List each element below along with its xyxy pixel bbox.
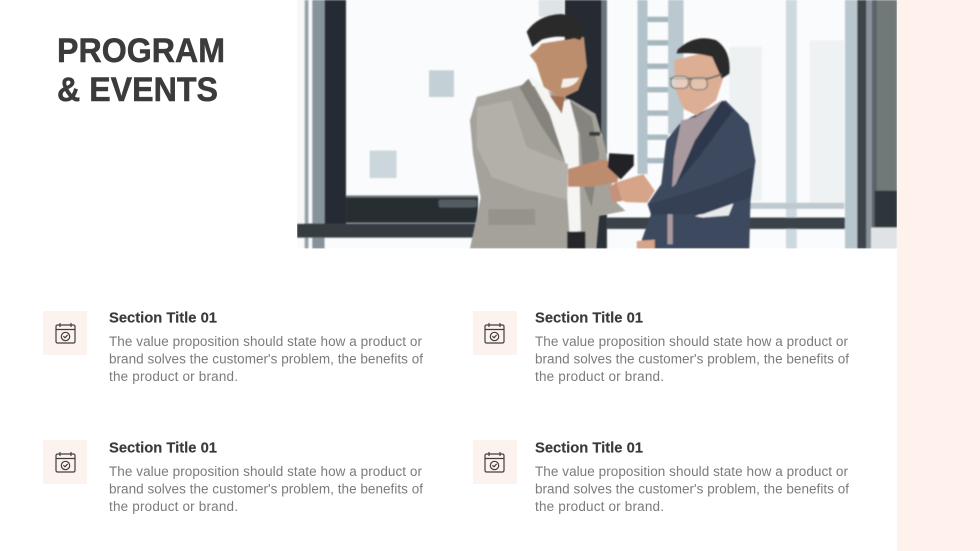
item 4 (bottom right) (473, 440, 849, 514)
right man's hand (615, 174, 655, 203)
icon: calendar with check (473, 440, 517, 484)
icon: calendar with check (43, 440, 87, 484)
heading: Section Title 01 (535, 310, 643, 326)
text block (109, 334, 423, 384)
phone (608, 153, 634, 179)
text block (535, 334, 849, 384)
text block: brand solves the customer's problem, the benefits of (109, 482, 423, 496)
text block (109, 464, 423, 514)
text block: The value proposition should state how a product or (535, 464, 848, 479)
photo: two businessmen looking at a phone by a window (297, 0, 897, 249)
text block (535, 464, 849, 514)
title (57, 32, 225, 109)
icon: calendar with check (43, 311, 87, 355)
icon: calendar with check (473, 311, 517, 355)
text block: brand solves the customer's problem, the benefits of (535, 352, 849, 366)
right man (639, 100, 755, 249)
right side panel (897, 0, 980, 551)
item 1 (top left) (43, 310, 423, 384)
text block: the product or brand. (535, 499, 664, 514)
left man (470, 84, 625, 249)
text block: the product or brand. (109, 369, 238, 384)
text block: brand solves the customer's problem, the benefits of (535, 482, 849, 496)
title: & EVENTS (57, 71, 218, 109)
text block: the product or brand. (535, 369, 664, 384)
item 2 (top right) (473, 310, 849, 384)
text block: the product or brand. (109, 499, 238, 514)
left man's hand (568, 159, 622, 187)
heading: Section Title 01 (109, 440, 217, 456)
heading: Section Title 01 (109, 310, 217, 326)
heading: Section Title 01 (535, 440, 643, 456)
title: PROGRAM (57, 32, 225, 70)
item 3 (bottom left) (43, 440, 423, 514)
text block: brand solves the customer's problem, the benefits of (109, 352, 423, 366)
text block: The value proposition should state how a product or (535, 334, 848, 349)
text block: The value proposition should state how a product or (109, 334, 422, 349)
text block: The value proposition should state how a product or (109, 464, 422, 479)
